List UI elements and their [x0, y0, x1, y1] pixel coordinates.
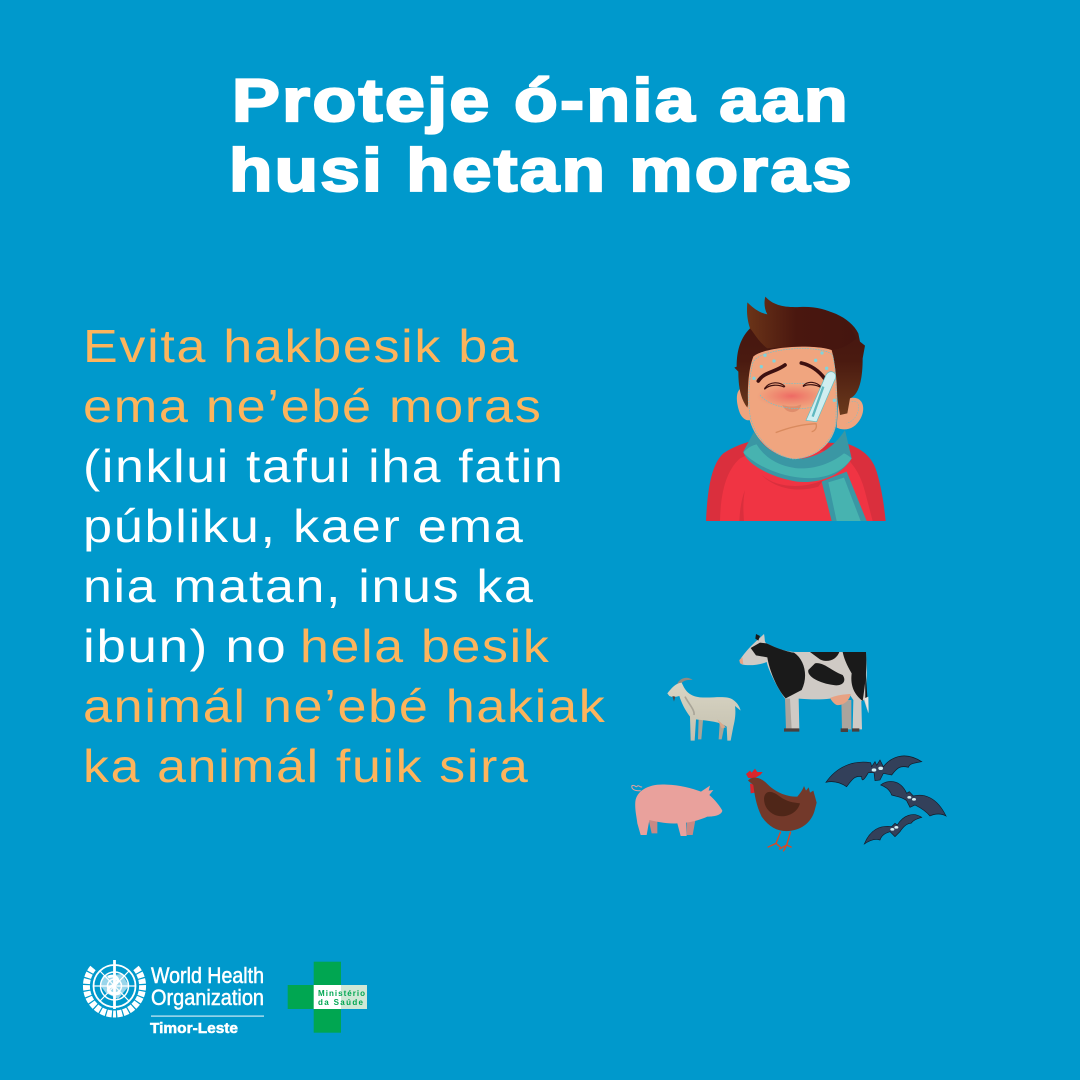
title: husi hetan moras: [229, 137, 854, 204]
body text: nia matan, inus ka: [83, 560, 534, 612]
wordmark: [150, 963, 264, 1037]
body text: (inklui tafui iha fatin: [83, 440, 564, 492]
rooster: [746, 769, 817, 851]
body text: animál ne’ebé hakiak: [83, 680, 606, 732]
icon: sick man with thermometer: [706, 297, 886, 521]
goat: [667, 678, 741, 741]
sweat and dashed mask outline: [749, 349, 836, 459]
wordmark: Organization: [151, 985, 264, 1010]
logo: World Health Organization: [86, 960, 264, 1037]
thermometer: [806, 372, 836, 422]
hair front: [747, 297, 857, 350]
logo: Ministério da Saúde: Ministério: [318, 989, 365, 998]
face: [748, 347, 837, 459]
blush and nose: [757, 384, 827, 408]
bats: [826, 756, 946, 844]
scarf: [822, 472, 867, 521]
icon: farm and wild animals: [632, 634, 946, 851]
hair back: [734, 307, 865, 415]
title: Proteje ó-nia aan: [232, 67, 850, 134]
eyebrows and eyes: [758, 365, 785, 381]
body text: hela besik: [300, 620, 550, 672]
body text: públiku, kaer ema: [83, 500, 524, 552]
sweater: [706, 440, 886, 521]
mouth: [776, 424, 816, 433]
body text: Evita hakbesik ba: [83, 320, 520, 372]
body text: ibun) no: [83, 620, 288, 672]
wordmark: Timor-Leste: [150, 1020, 238, 1037]
body text: [83, 320, 606, 792]
emblem: [86, 960, 143, 1014]
title: [229, 67, 854, 204]
pig: [632, 784, 722, 836]
logo: Ministério da Saúde: da Saúde: [318, 998, 364, 1007]
body text: ka animál fuik sira: [83, 740, 530, 792]
ears: [737, 389, 753, 420]
logo: Ministério da Saúde: [288, 962, 367, 1033]
wordmark: World Health: [151, 963, 264, 988]
cow: [739, 634, 869, 732]
body text: ema ne’ebé moras: [83, 380, 542, 432]
